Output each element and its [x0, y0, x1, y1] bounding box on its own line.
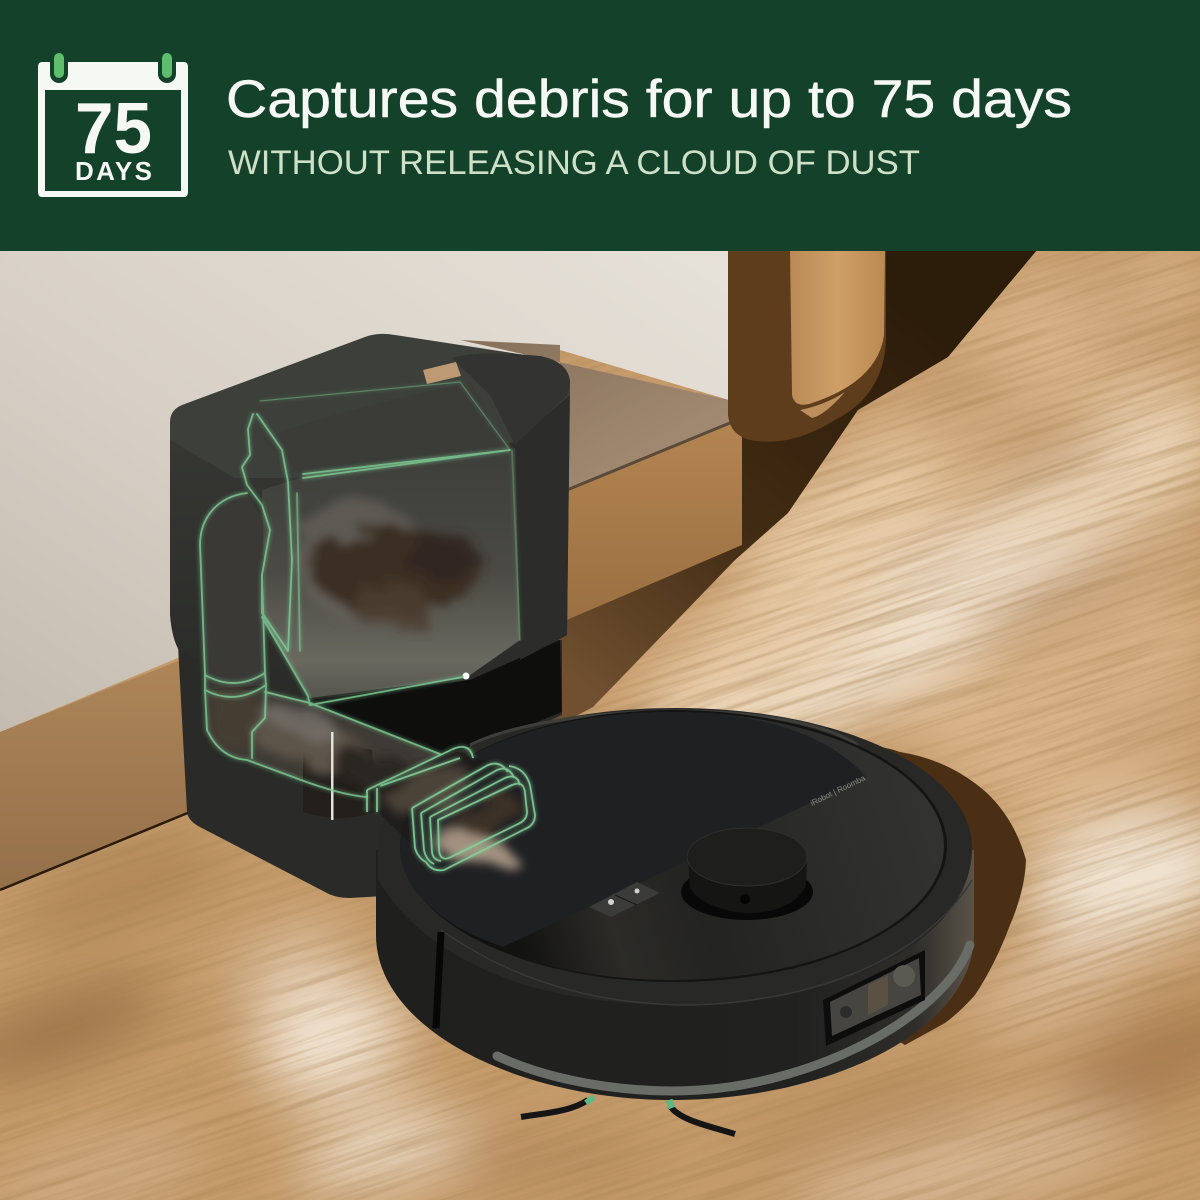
baseboard [0, 658, 190, 890]
nozzle green outlines [367, 747, 535, 870]
grey lower strip [497, 945, 970, 1091]
power light [462, 672, 470, 680]
calendar ring right [158, 50, 176, 83]
vertical pipe [200, 493, 265, 690]
icon: 75 days calendar [38, 50, 188, 197]
shadow area behind robot [550, 250, 1037, 730]
calendar days label: DAYS [75, 156, 152, 186]
lid smooth half [400, 712, 944, 980]
calendar ring left [50, 50, 68, 83]
bin top [262, 382, 510, 476]
dock upper body [170, 350, 570, 700]
bumper seams [441, 880, 972, 1005]
duct translucent fill [367, 749, 510, 848]
dock lid [170, 334, 570, 478]
bin interior [262, 448, 520, 698]
calendar number: 75 [75, 89, 152, 169]
dock dark recess [300, 640, 562, 755]
title: Captures debris for up to 75 days [226, 70, 1072, 129]
header band [0, 0, 1200, 251]
dust in bin [295, 500, 480, 629]
lid textured half [400, 712, 866, 947]
nozzle dust [382, 758, 526, 873]
rim back highlight [470, 711, 858, 745]
lidar turret [681, 828, 813, 920]
wall [0, 250, 730, 740]
dock lower base [178, 640, 562, 898]
lower duct [207, 690, 440, 797]
robot top rim [378, 708, 972, 1005]
wooden shelf [460, 340, 742, 622]
calendar frame [38, 62, 188, 197]
wood floor base with light patches [0, 250, 1200, 1200]
control buttons [589, 882, 660, 917]
metal highlight [331, 732, 334, 820]
logo tag [423, 362, 461, 384]
dust in lower pipe [207, 690, 438, 807]
duct dark chamber [303, 735, 376, 818]
subtitle: WITHOUT RELEASING A CLOUD OF DUST [228, 144, 920, 182]
lid right part [452, 353, 570, 445]
side brushes [521, 1097, 735, 1134]
sensor window [823, 950, 925, 1046]
dock: dust base station [170, 334, 570, 898]
robot side wall [376, 850, 974, 1100]
green outlines of bin and pipe [200, 382, 520, 797]
rim inner dark groove [401, 710, 947, 982]
robot shadow on floor [860, 745, 1026, 1045]
vase [728, 250, 886, 442]
brand text: iRobot | Roomba [809, 773, 867, 808]
robot vacuum [376, 708, 974, 1100]
bin right shell [510, 385, 570, 660]
suction nozzle with dust [367, 747, 535, 873]
